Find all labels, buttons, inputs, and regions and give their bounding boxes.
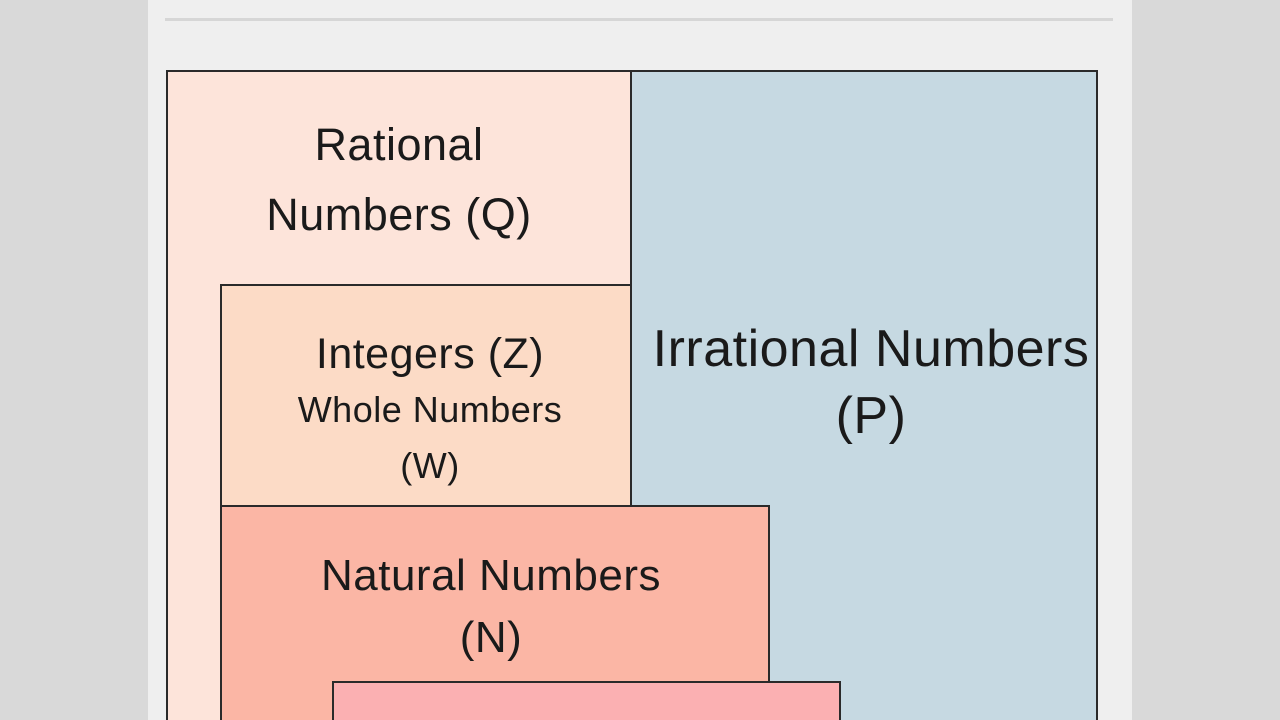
heading: irrational numbers: (P) — [836, 387, 906, 445]
heading: natural numbers: Natural Numbers — [321, 551, 661, 600]
heading: natural numbers — [321, 551, 661, 662]
panel: natural numbers — [220, 505, 770, 720]
heading: irrational numbers: Irrational Numbers — [653, 320, 1089, 378]
heading: integers and whole numbers: Whole Numbers — [298, 389, 562, 430]
panel: page background card — [148, 0, 1132, 720]
heading: rational numbers: Numbers (Q) — [266, 189, 532, 240]
panel: bottom inner box — [332, 681, 841, 720]
panel: irrational numbers — [630, 70, 1098, 720]
heading: irrational numbers — [653, 320, 1089, 445]
heading: rational numbers: Rational — [314, 119, 484, 170]
panel: integers — [220, 284, 632, 508]
heading: integers and whole numbers — [298, 330, 562, 486]
heading: natural numbers: (N) — [460, 613, 522, 662]
heading: integers and whole numbers: Integers (Z) — [316, 330, 544, 378]
heading: integers and whole numbers: (W) — [400, 445, 460, 486]
panel: rational numbers — [166, 70, 632, 720]
header divider — [165, 18, 1113, 21]
heading: rational numbers — [266, 119, 532, 240]
